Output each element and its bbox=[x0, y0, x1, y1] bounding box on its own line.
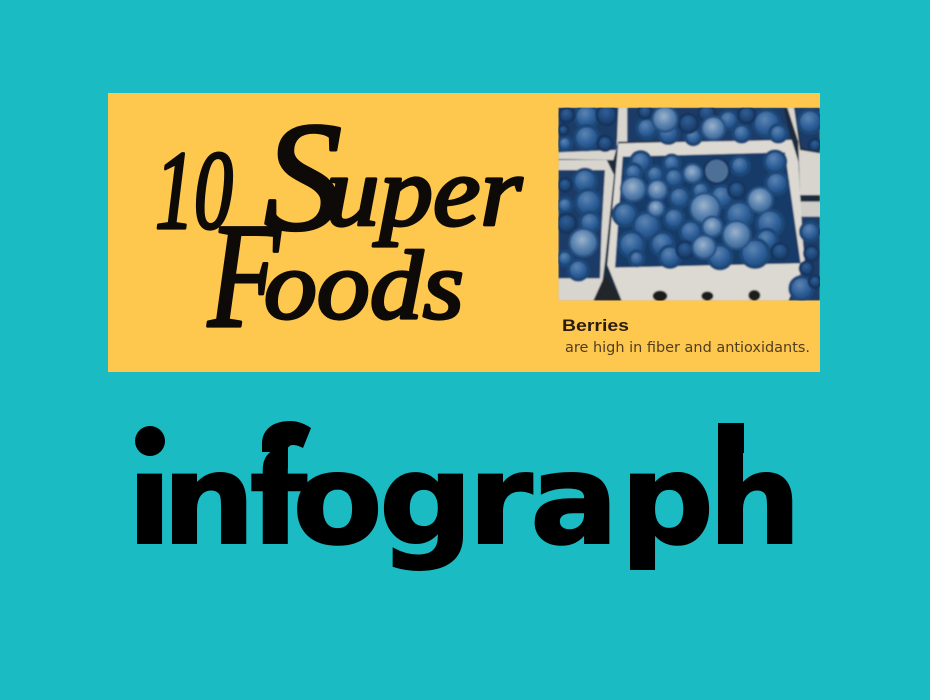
photo: blueberry trays bbox=[557, 105, 822, 301]
central tray bbox=[607, 140, 804, 301]
caption: Berries bbox=[562, 316, 810, 356]
title: 10 Super Foods: S bbox=[264, 90, 342, 263]
title: 10 Super Foods bbox=[155, 90, 523, 359]
panel: banner bbox=[108, 90, 822, 372]
left tray bbox=[558, 160, 614, 301]
top trays bbox=[558, 108, 618, 155]
caption heading: Berries bbox=[562, 316, 629, 335]
title: 10 Super Foods: 10 bbox=[155, 129, 233, 253]
holes bbox=[653, 291, 667, 301]
title: 10 Super Foods: uper bbox=[326, 136, 523, 247]
berries bbox=[558, 105, 822, 300]
right tray bbox=[800, 200, 820, 276]
title: 10 Super Foods: F bbox=[207, 193, 281, 359]
title: 10 Super Foods: oods bbox=[264, 232, 464, 340]
wordmark: infograph: infograph bbox=[127, 428, 801, 573]
caption body: are high in fiber and antioxidants. bbox=[565, 340, 810, 356]
